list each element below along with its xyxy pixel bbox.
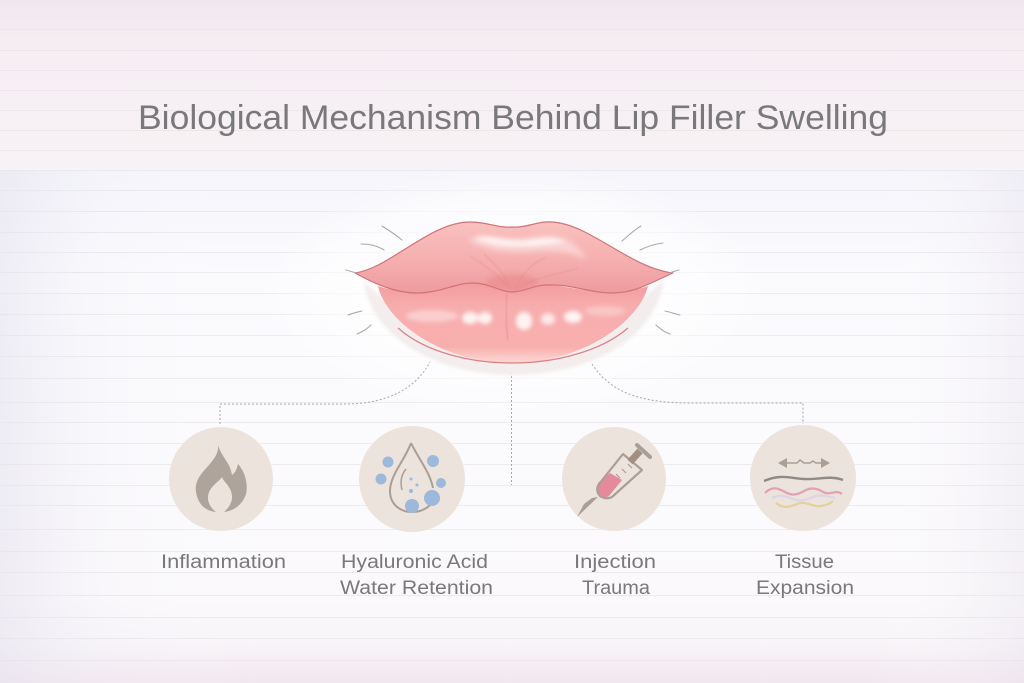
label: Hyaluronic Acid Water Retention: Hyaluronic Acid xyxy=(341,552,488,573)
swelling marks xyxy=(346,226,680,334)
upper lip pleats xyxy=(470,254,578,291)
upper lip highlight xyxy=(468,236,586,259)
item: hyaluronic acid xyxy=(340,426,493,599)
label: Hyaluronic Acid Water Retention: Water Retention xyxy=(340,578,493,599)
label: Injection Trauma: Trauma xyxy=(582,578,650,599)
item: inflammation xyxy=(161,427,286,573)
label: Tissue Expansion: Expansion xyxy=(756,578,854,599)
lip halo shadow xyxy=(364,280,664,375)
icon: syringe xyxy=(562,427,666,531)
icon: tissue layers xyxy=(750,425,856,531)
lips illustration xyxy=(355,222,673,375)
title: Biological Mechanism Behind Lip Filler Swelling xyxy=(138,99,888,137)
label: Inflammation: Inflammation xyxy=(161,552,286,573)
upper lip xyxy=(355,222,673,293)
icon: flame xyxy=(169,427,273,531)
item: injection trauma xyxy=(562,427,666,599)
lower lip highlights xyxy=(406,306,625,330)
label: Injection Trauma: Injection xyxy=(574,552,656,573)
item: tissue expansion xyxy=(750,425,856,599)
dashed connector lines xyxy=(220,362,803,485)
lower lip bottom edge xyxy=(398,328,628,363)
label: Tissue Expansion: Tissue xyxy=(775,552,834,573)
lower lip xyxy=(378,283,648,363)
icon: water drop with molecules xyxy=(359,426,465,532)
lower lip centre crease xyxy=(506,293,508,340)
